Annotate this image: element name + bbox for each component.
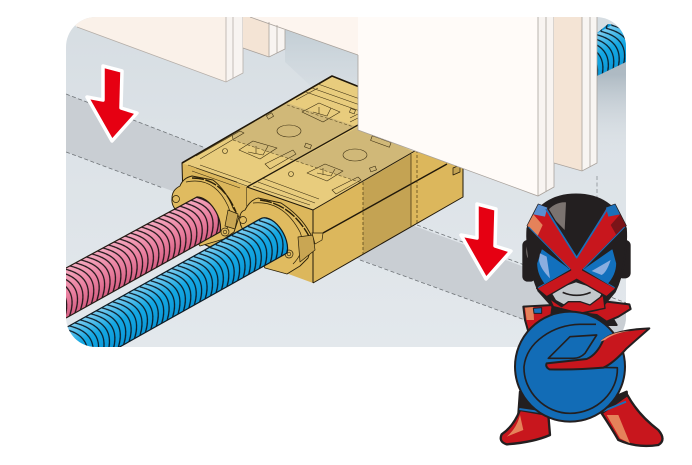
nut: blue connector	[240, 198, 323, 274]
mascot arm and glove	[523, 288, 631, 332]
mascot ears	[522, 240, 631, 282]
mascot shield	[515, 312, 649, 422]
pipe: blue	[60, 218, 288, 358]
mascot chin	[549, 282, 605, 313]
wall: centre large	[358, 17, 554, 196]
nut: pink connector	[172, 176, 239, 246]
pipe: pink	[66, 197, 220, 318]
wall: rear stud	[243, 17, 358, 57]
floor band	[66, 94, 640, 347]
mascot helmet highlight	[547, 202, 566, 230]
mascot helmet	[527, 194, 626, 308]
panel: floor scene	[60, 17, 640, 358]
rear floor centre	[285, 30, 358, 66]
mascot eye right	[582, 248, 617, 285]
mascot	[501, 194, 662, 446]
arrow: right	[461, 204, 511, 279]
mascot red X visor	[527, 204, 626, 297]
arrow: left	[87, 66, 137, 141]
wall: left	[66, 17, 243, 82]
wall: right stud	[554, 17, 598, 197]
rear floor right	[598, 40, 626, 120]
mascot legs and boots	[501, 392, 662, 446]
pipe: blue rear	[597, 24, 626, 76]
connection box: right	[247, 124, 463, 283]
mascot eye left	[537, 248, 572, 285]
connection box: left	[182, 76, 362, 250]
